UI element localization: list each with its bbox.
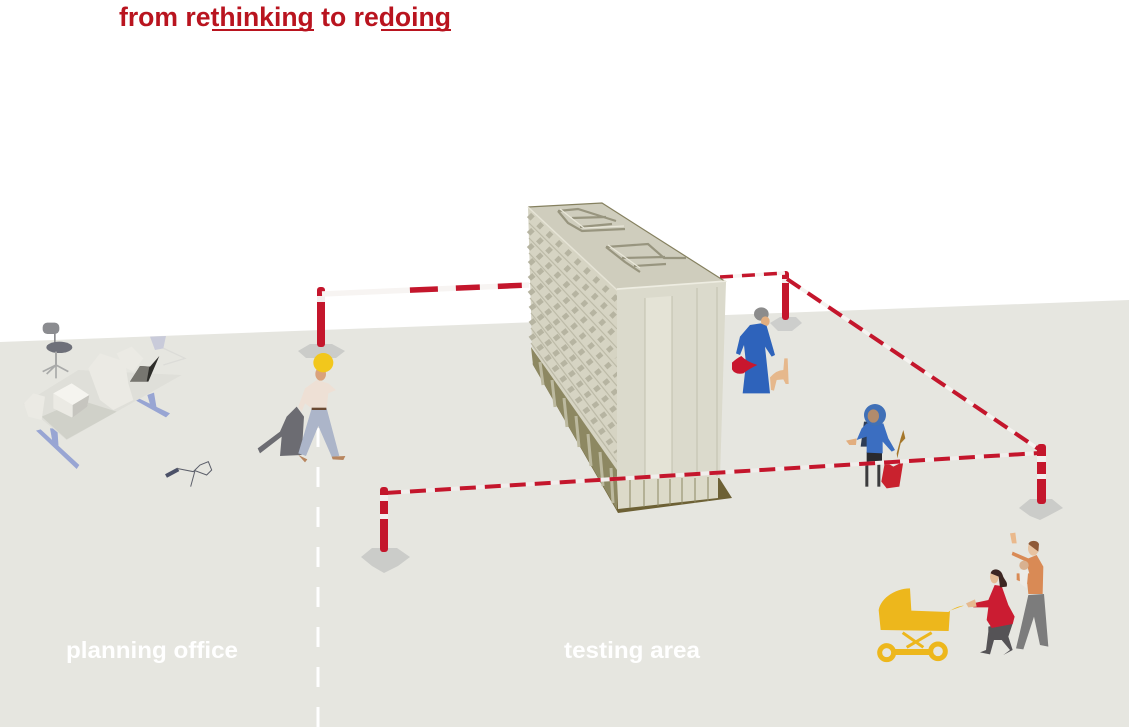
barrier tape: front xyxy=(385,453,1040,493)
chair xyxy=(43,323,72,378)
building ground floor xyxy=(531,347,617,510)
desk lamp xyxy=(160,347,185,365)
ground plane xyxy=(0,300,1129,727)
desk paper piles xyxy=(24,347,143,420)
handbag xyxy=(732,356,757,374)
building front face xyxy=(617,282,726,480)
barrier tape: back left xyxy=(322,285,529,294)
planning office items xyxy=(23,323,345,487)
building floors xyxy=(529,215,617,462)
roof structures xyxy=(558,209,686,272)
grandmother and cat xyxy=(732,307,789,393)
barrier tape: back right xyxy=(720,273,785,277)
barrier tape: right side xyxy=(787,279,1040,450)
barrier post: front left xyxy=(361,487,410,573)
laptop xyxy=(130,356,159,382)
building xyxy=(528,203,732,513)
barrier post: back right xyxy=(770,271,802,331)
building roof xyxy=(528,203,726,290)
barrier post: back left xyxy=(298,287,345,358)
dashed divider line xyxy=(316,428,320,727)
pram xyxy=(879,588,964,660)
boy with guitar xyxy=(846,404,905,488)
mother xyxy=(966,569,1015,655)
title: from rethinking to redoing xyxy=(119,2,451,32)
label: testing area: testing area xyxy=(564,637,701,663)
father and baby xyxy=(1010,533,1048,649)
family with pram xyxy=(879,533,1048,660)
desk top xyxy=(23,370,182,440)
building ground shadow xyxy=(532,363,732,513)
guitar xyxy=(897,430,905,458)
tie on floor xyxy=(166,462,212,487)
worker xyxy=(258,353,345,462)
barrier post: front right xyxy=(1019,444,1063,520)
desk legs xyxy=(36,393,170,469)
cat xyxy=(770,358,789,391)
label: planning office: planning office xyxy=(66,637,238,663)
building base glazing xyxy=(617,476,718,509)
building side face xyxy=(528,207,617,478)
